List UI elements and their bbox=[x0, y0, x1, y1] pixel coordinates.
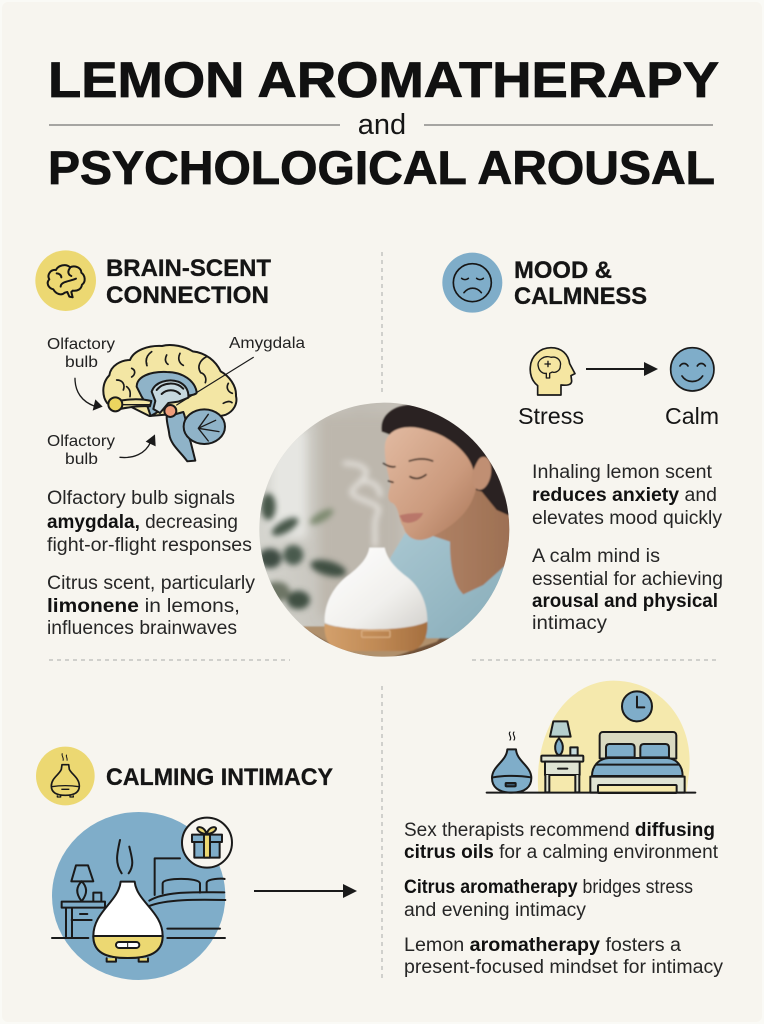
text block: limonene bbox=[47, 573, 256, 639]
label: olfactory bulb top bbox=[47, 336, 115, 371]
hair front bbox=[446, 436, 480, 470]
brows, eyes and lips bbox=[383, 459, 433, 482]
illustration: diffuser in bedroom bbox=[52, 812, 232, 980]
text block: diffusing citrus oils bbox=[404, 820, 719, 863]
shirt bbox=[390, 533, 504, 640]
icon: calm smiley bbox=[671, 348, 714, 391]
diffuser ceramic bbox=[325, 548, 427, 630]
heading: brain-scent connection bbox=[106, 255, 271, 309]
panel: brain-scent connection bbox=[35, 250, 305, 639]
text block: calm mind: intimacy bbox=[532, 613, 608, 634]
arrow: stress to calm bbox=[586, 362, 658, 376]
neck and shoulder bbox=[430, 488, 513, 594]
text block: present-focused mindset: present-focused mindset for intimacy bbox=[404, 957, 724, 978]
panel: calming intimacy bbox=[36, 747, 357, 980]
text block: reduces anxiety: Inhaling lemon scent bbox=[532, 462, 713, 483]
text block: reduces anxiety: elevates mood quickly bbox=[532, 508, 722, 529]
text block: citrus aromatherapy bbox=[404, 877, 693, 921]
heading: calming intimacy: CALMING INTIMACY bbox=[106, 764, 333, 791]
text block: reduces anxiety: reduces anxiety and bbox=[532, 485, 717, 506]
ear bbox=[473, 456, 492, 491]
icon: diffuser badge bbox=[36, 747, 95, 805]
label: olfactory bulb bottom: bulb bbox=[65, 451, 98, 468]
photo: woman inhaling diffuser mist bbox=[259, 402, 510, 657]
icon: brain badge bbox=[35, 250, 96, 311]
text block: limonene: influences brainwaves bbox=[47, 618, 237, 639]
plant bbox=[258, 493, 348, 609]
text block: olfactory signals: fight-or-flight responses bbox=[47, 535, 252, 556]
text block: limonene: Citrus scent, particularly bbox=[47, 573, 256, 594]
heading: brain-scent connection: BRAIN-SCENT bbox=[106, 255, 271, 282]
text block: diffusing citrus oils: citrus oils for a calming environment bbox=[404, 842, 719, 863]
text block: reduces anxiety bbox=[532, 462, 722, 529]
arrow: to bedroom result bbox=[254, 884, 357, 898]
illustration: bedroom with clock bbox=[487, 681, 695, 793]
text block: calm mind bbox=[532, 546, 723, 634]
heading: mood and calmness: MOOD & bbox=[514, 257, 612, 284]
label: stress: Stress bbox=[518, 403, 584, 429]
label: olfactory bulb bottom: Olfactory bbox=[47, 433, 115, 450]
heading: mood and calmness: CALMNESS bbox=[514, 283, 647, 310]
icon: stress head bbox=[530, 348, 575, 395]
text block: limonene: limonene in lemons, bbox=[47, 596, 240, 617]
label: amygdala: Amygdala bbox=[229, 335, 305, 352]
table bbox=[290, 627, 463, 665]
text block: citrus aromatherapy: Citrus aromatherapy bridges stress bbox=[404, 877, 693, 898]
label: olfactory bulb top: bulb bbox=[65, 354, 98, 371]
title: PSYCHOLOGICAL AROUSAL bbox=[48, 141, 715, 194]
text block: citrus aromatherapy: and evening intimacy bbox=[404, 900, 587, 921]
text block: calm mind: arousal and physical bbox=[532, 591, 718, 612]
panel: mood and calmness bbox=[442, 253, 723, 634]
heading: mood and calmness bbox=[514, 257, 647, 310]
brain diagram bbox=[75, 345, 253, 461]
icon: sad face badge bbox=[442, 253, 502, 313]
text block: present-focused mindset bbox=[404, 935, 724, 978]
hair back bbox=[381, 404, 517, 528]
text block: calm mind: A calm mind is bbox=[532, 546, 660, 567]
diffuser wood base bbox=[324, 622, 427, 651]
steam bbox=[345, 463, 380, 545]
panel: evening bedroom bbox=[404, 681, 724, 978]
title bbox=[48, 52, 719, 194]
text block: present-focused mindset: Lemon aromatherapy fosters a bbox=[404, 935, 681, 956]
text block: olfactory signals: amygdala, decreasing bbox=[47, 512, 238, 533]
text block: calm mind: essential for achieving bbox=[532, 569, 723, 590]
text block: olfactory signals bbox=[47, 488, 252, 556]
title: LEMON AROMATHERAPY bbox=[48, 52, 719, 108]
heading: brain-scent connection: CONNECTION bbox=[106, 282, 269, 309]
label: olfactory bulb top: Olfactory bbox=[47, 336, 115, 353]
text block: diffusing citrus oils: Sex therapists recommend diffusing bbox=[404, 820, 715, 841]
label: calm: Calm bbox=[665, 403, 719, 429]
label: olfactory bulb bottom bbox=[47, 433, 115, 468]
title: and bbox=[358, 109, 406, 141]
face bbox=[385, 427, 477, 540]
text block: olfactory signals: Olfactory bulb signals bbox=[47, 488, 235, 509]
